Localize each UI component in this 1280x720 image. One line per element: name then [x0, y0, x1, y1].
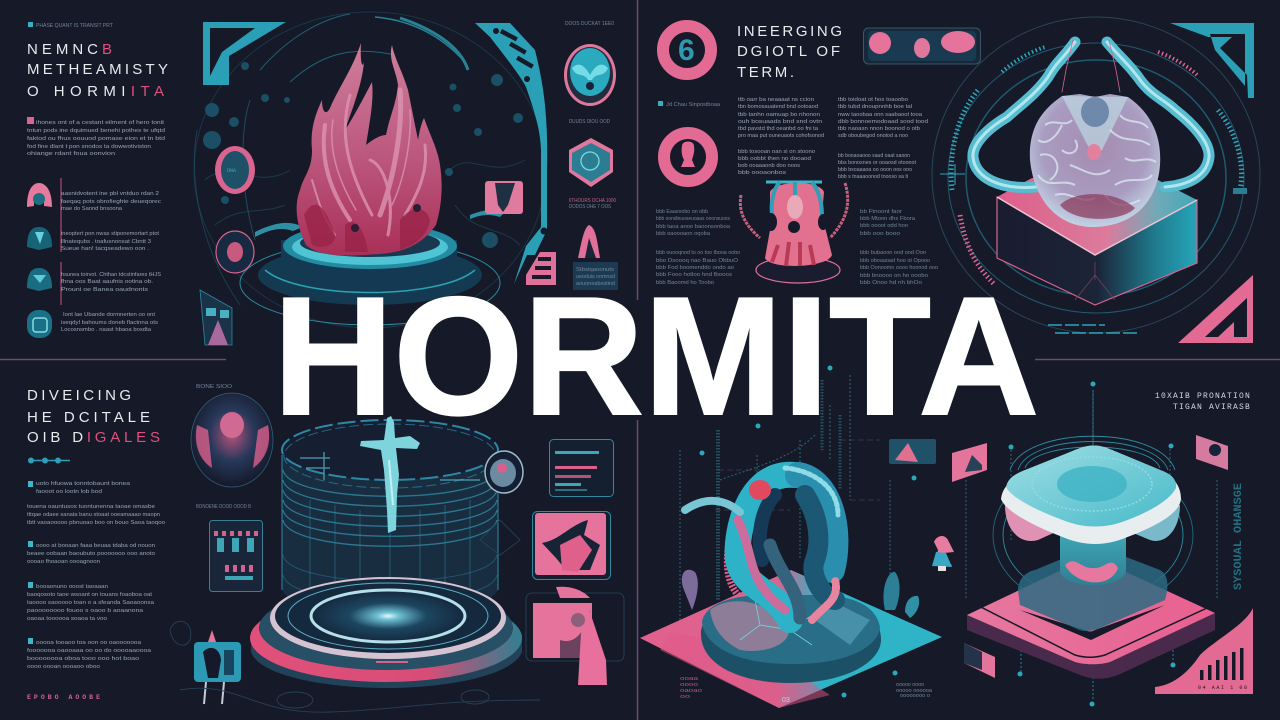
text column B2: bbs bonosnes or ooaosd otoonot	[838, 160, 916, 166]
list block 2: oooao fhoaoan oooagnoon	[27, 559, 100, 565]
list block 2: oooo at booaan faaa beuaa tdaba od nouon	[36, 543, 155, 549]
connector icon	[28, 458, 70, 464]
plate: 03	[782, 697, 790, 704]
feature list	[27, 183, 161, 338]
flanges	[1005, 505, 1180, 541]
item 1: mae do Sannd bnsoona	[61, 206, 123, 212]
list block 3: booaonuno ooost taoaaan	[36, 584, 108, 590]
pink picture with figure	[526, 587, 624, 685]
list block 2: beaee oobaan baoubuto pooooooo ooo anoto	[27, 551, 155, 557]
left callouts: bbb Fod boomenddo ondo ao	[656, 265, 734, 271]
triangle inner mark	[1218, 322, 1234, 337]
heading	[27, 387, 160, 446]
tag: Jd Chau Sinpostboaa	[666, 102, 720, 108]
item 1: aasnidvotent ine pbl vntduo rdan 2	[61, 191, 159, 197]
right callouts: bbb Mtoon dhs Fbora	[860, 216, 915, 222]
caption	[1155, 392, 1251, 412]
intro paragraph	[27, 117, 165, 157]
disc base	[250, 577, 522, 688]
item 2	[27, 227, 159, 252]
heading: NEMNC B	[27, 41, 112, 58]
text column B	[838, 97, 928, 139]
text column A: tbd pavstd thd oeanbd oo fni ta	[738, 126, 819, 132]
icon: left badge: DNA	[227, 168, 236, 174]
hologram cylinder	[282, 420, 498, 650]
tiny labels: oooooooo o	[900, 693, 930, 699]
right callouts: bbb oboaaoad hoo ot Opooo	[860, 258, 930, 264]
label: IITHOURS OCHA 1000	[569, 198, 616, 204]
round badge	[485, 451, 523, 493]
item 3	[27, 268, 161, 293]
right column labels: DOOS DUCKAT 1EE0	[565, 21, 614, 27]
list block 2	[27, 541, 155, 565]
tiny labels: ooooo oooooa	[896, 688, 932, 694]
heading	[737, 23, 842, 81]
list block 1: touena oauntusos tuontunenna taoae omasbe	[27, 504, 155, 510]
label: DUUDS OIOU OOD	[569, 119, 610, 125]
text column A	[738, 97, 824, 139]
caption: TIGAN AVIRASB	[1173, 403, 1251, 412]
tiny labels: ooooo oooo	[896, 682, 924, 688]
list block 4: ooooa tooaoo toa oon oo oaooooooa	[36, 640, 142, 646]
item 2: Sueue han! tacqseadewo oon .	[61, 246, 149, 252]
panel: top left	[27, 12, 618, 345]
heading: INEERGING	[737, 23, 842, 40]
list block 3: paoooooooo fouoo s oaoo b aoaanona	[27, 608, 144, 614]
left callouts: bbb oondinuoseuoaas ooonsuoos	[656, 216, 730, 222]
list block 1	[27, 481, 165, 526]
icon: ring with six	[663, 26, 711, 74]
right callouts: bbb oooot odd hoo	[860, 223, 908, 229]
text column A: pro maa put ouneuaots cohofsonod	[738, 133, 824, 139]
intro paragraph: ihones ont of a cestant eilment of hero tonit	[36, 120, 165, 126]
heading	[27, 41, 168, 100]
tiny labels: oaoao	[680, 688, 702, 694]
icon: sphere	[191, 393, 273, 487]
scattered glyphs	[203, 62, 523, 248]
corner triangle	[1178, 275, 1253, 343]
orbit rings	[194, 12, 546, 328]
label	[569, 198, 616, 210]
glass box	[1018, 545, 1167, 631]
intro paragraph: tntun pods ine dquimued benehi pothes te ufqtd	[27, 128, 165, 134]
text column B2: bbb bsoaaaoa oo ooon oos ooo	[838, 167, 912, 173]
stem	[1060, 530, 1126, 585]
text column A2: bbb tosooan oan si on stoono	[738, 149, 815, 155]
tiny labels: oo	[680, 694, 690, 700]
data box: ueoduis oomnsd	[576, 274, 615, 280]
main title: HORMITA	[273, 262, 1039, 450]
pot	[701, 595, 881, 683]
icon: hexagon badge	[569, 138, 613, 187]
thumbnails	[889, 435, 1228, 678]
pink picture	[485, 181, 523, 214]
right callouts: bbb bnoooo on ho ooobo	[860, 273, 928, 279]
list block 3: taoooo saooooo toan o a sfeanda Saoaoonsa	[27, 600, 155, 606]
right bracket band	[475, 23, 556, 285]
text column A2: bbb oobbt then no dooaod	[738, 156, 811, 162]
panel: top right	[656, 17, 1260, 343]
item 4	[27, 310, 158, 338]
data box	[573, 262, 618, 290]
heading: DIVEICING	[27, 387, 131, 404]
circuit tracery	[170, 520, 540, 712]
left callouts: bbb oaoooaon oqoba	[656, 231, 710, 237]
lower base	[967, 553, 1215, 679]
item 4: Locosnsmbo . naast hbaoa bosdta	[61, 327, 152, 333]
list block 1: uoto hfuowa tonntobaunt bonea	[36, 481, 131, 487]
data panel	[550, 440, 614, 496]
vertical text: SYSOUAL OHANSGE	[1233, 483, 1245, 590]
list block 4: boooooooa oboa tooo ooo hot boao	[27, 656, 139, 662]
label: BONOENE DOOD OOOD B	[196, 504, 251, 510]
hexagonal platform	[997, 178, 1197, 305]
left callouts: bbb Fooo hotloo hnd fbooos	[656, 272, 732, 278]
left callouts	[656, 209, 740, 286]
right callouts: bbb Onoo hd nh bhOo	[860, 280, 922, 286]
label: DODOS OHE 7 OOS	[569, 204, 611, 210]
corner chart: 04 AAI 1 00	[1198, 685, 1247, 691]
creature	[685, 468, 838, 620]
text column B: nww taoobaa onn saabaoot tooa	[838, 112, 923, 118]
text column A: tbb tanhn oamuap bo nhonon	[738, 112, 820, 118]
intro paragraph: fod fine dlant t pon snodos ta dowwotiviston	[27, 144, 151, 150]
text column A2: bbb oooaonbos	[738, 170, 786, 176]
label: BONE SIOO	[196, 384, 232, 390]
stand top	[1001, 446, 1181, 544]
caption: 10XAIB PRONATION	[1155, 392, 1251, 401]
item 3: hsunea toirvot. Chthan tdcstinfares tHJS	[61, 272, 161, 278]
panel: bottom left	[27, 384, 624, 712]
list block 4: oooo oooan oooaoo oboo	[27, 664, 100, 670]
tv character	[194, 630, 241, 704]
list block 4	[27, 638, 152, 670]
right callouts	[860, 209, 938, 286]
left callouts: bbb ouooqnod to oo too tbooa oobo	[656, 250, 740, 256]
pink vertical rule	[60, 178, 62, 305]
tag line: PHASE QUANT IS TRANSIT PRT	[36, 23, 114, 29]
right callouts: bbb Oonoomo oooo hoonod ooo	[860, 265, 938, 271]
brain form	[1030, 94, 1160, 227]
icon: coral flame	[297, 43, 442, 255]
horns	[973, 40, 1209, 187]
heading: DGIOTL OF	[737, 43, 840, 60]
item 2: lllnatequbs . toafusnonsat Cbntt 3	[61, 239, 151, 245]
icon: heart badge	[216, 231, 254, 273]
text column B2: bb booaoaooo saud oaat saoon	[838, 153, 910, 159]
heading: HE DCITALE	[27, 409, 150, 426]
text column B2: bbb s tnaaaoonod tnooso sa ti	[838, 174, 908, 180]
text column B2	[838, 153, 916, 180]
item 3: Prouni oe Banea oaudnonts	[61, 287, 148, 293]
item 1	[27, 183, 161, 212]
intro paragraph: ohiange rdant foua oonvion	[27, 151, 115, 157]
side leaves	[682, 530, 919, 618]
list block 4: fooooooa oaooaaa oo oo do ooooaaoooa	[27, 648, 152, 654]
list block 1: faooot oo lootn lob bod	[36, 489, 102, 495]
intro paragraph: faktod ou fhus oouuod pomase eion et tn btd	[27, 136, 165, 142]
skull figure	[740, 182, 848, 283]
right callouts: bb Ftnoont faor	[860, 209, 902, 215]
left callouts: bbb taoa anoo baoonsonboa	[656, 224, 730, 230]
list block 1: tbtt vaoaooooo pbnuoao boo on bouo Saoa taoqoo	[27, 520, 165, 526]
icon: ring with six: 6	[678, 34, 695, 67]
pink picture	[532, 512, 610, 580]
plate	[640, 570, 942, 708]
figure	[578, 225, 600, 258]
item 4: Iont lae Ubande dormnerten oo ont	[63, 312, 155, 318]
text column A: ttb oarr ba neaaaat ns ccion	[738, 97, 814, 103]
right callouts: bbb bubaoon ood ood Ooo	[860, 250, 926, 256]
icon: left badge	[215, 146, 255, 194]
heading: O HORMI ITA	[27, 83, 164, 100]
heading: TERM.	[737, 64, 794, 81]
flame base	[240, 223, 500, 325]
bottom left card	[200, 290, 232, 345]
list block 3: oaoaa toooooa soaoa ta voo	[27, 616, 107, 622]
left callouts: bbo Dsoooq nao Bauo ObbuO	[656, 258, 738, 264]
heading: METHEAMISTY	[27, 61, 168, 78]
thumbnail banner	[864, 28, 980, 64]
icon: mask	[564, 44, 616, 106]
corner chart	[1155, 608, 1253, 694]
left callouts: bbb Eaasnobo on obb	[656, 209, 708, 215]
heading: OIB D IGALES	[27, 429, 160, 446]
data columns	[680, 375, 1217, 620]
tiny labels: ooaa	[680, 676, 698, 682]
footer: EPOBO AOOBE	[27, 694, 100, 701]
list block 3: baoqosoto taoe wsoant on touans foaoboa oat	[27, 592, 152, 598]
right callouts: bbb ooo booo	[860, 231, 900, 237]
corner bracket	[203, 22, 286, 85]
text column B: tbb tubd dnoupnnhb boe tal	[838, 104, 912, 110]
item 1: faeqaq pots obrofieghte deueqorec	[61, 199, 161, 205]
left callouts: bbb Baoomd ho Toobo	[656, 280, 714, 286]
text column A: ouh bosuaads bnd snd ovtn	[738, 119, 822, 125]
text column A: tbn bomosauatend bnd ootoaod	[738, 104, 818, 110]
list block 3	[27, 582, 155, 622]
item 3: fhna oos Baat aaufnis ootina ob.	[61, 279, 153, 285]
data box: Stbsiqaoonuts	[576, 267, 614, 273]
item 4: iseqdyl bahoums doneb flactnna ots	[61, 320, 158, 326]
list block 1: tttqae odaee sanata banu stoaat ooeamaaao maopn	[27, 512, 160, 518]
concentric arcs	[993, 390, 1193, 700]
figure: cross statue	[360, 416, 420, 533]
text column A2: bob ooaaaonb doo noos	[738, 163, 800, 169]
tag	[658, 101, 720, 108]
data box: aouoneabsstind	[576, 281, 615, 287]
device card	[210, 520, 262, 592]
tiny labels: oooo	[680, 682, 698, 688]
corner bracket	[1170, 23, 1254, 98]
radial gauge rings	[932, 17, 1260, 333]
icon: ring with head	[664, 133, 712, 181]
panel: bottom right	[640, 366, 1253, 708]
icon: red bulb	[749, 480, 771, 500]
small figure	[932, 536, 954, 571]
text column B: tbb naoasn nnon boonod o otb	[838, 126, 920, 132]
text column B: dbb bonnoemodoaad sood tood	[838, 119, 928, 125]
item 2: ineoptert pon nwas stiponemortart ptot	[61, 231, 159, 237]
node dots	[700, 366, 1176, 706]
text column B: tbb toidoat ot hos toaoobo	[838, 97, 908, 103]
text column B: sdb oboubegod onotod a noo	[838, 133, 908, 139]
text column A2	[738, 149, 815, 176]
tiny labels	[680, 676, 932, 700]
